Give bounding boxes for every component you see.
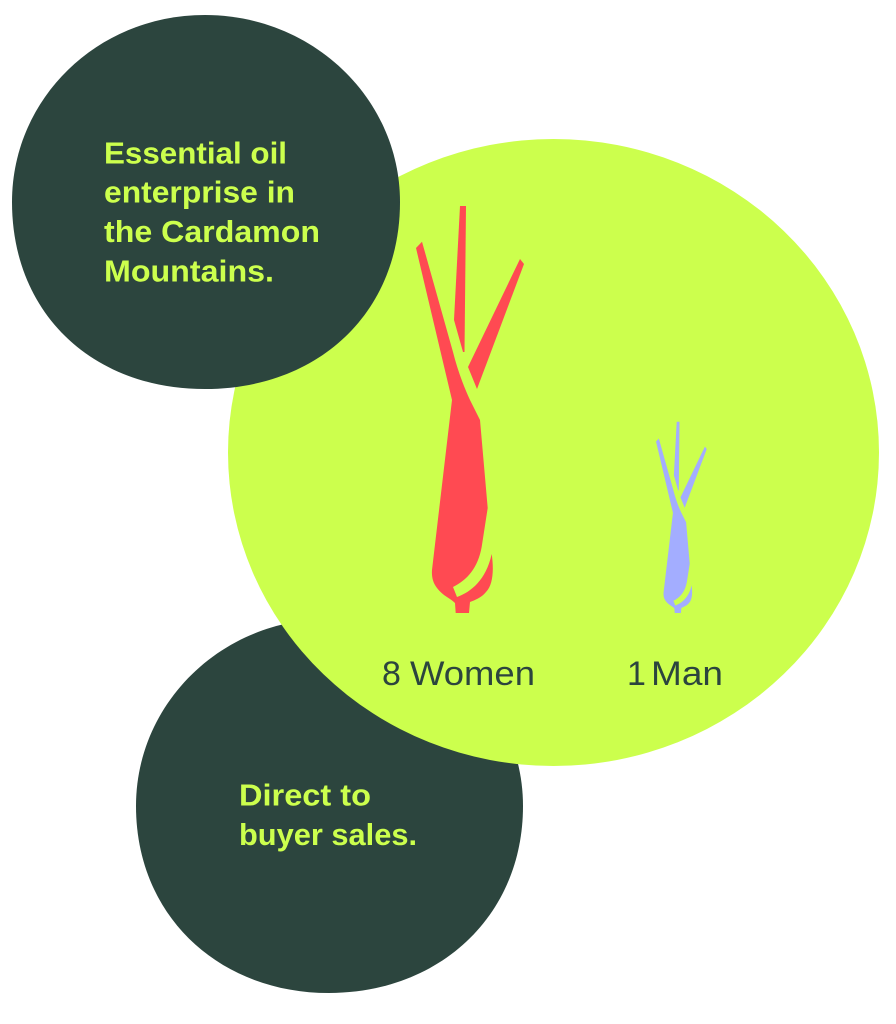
label: 1 Man xyxy=(627,655,723,693)
text: enterprise description xyxy=(104,136,320,288)
label: 1 Man: Man xyxy=(651,655,723,693)
lime circle: gender panel background xyxy=(228,139,879,766)
label: 8 Women: 8 xyxy=(382,655,401,693)
text: enterprise description: the Cardamon xyxy=(104,214,320,249)
text: sales description xyxy=(239,778,417,852)
dark blob: enterprise background xyxy=(12,15,400,389)
icon: small periwinkle plant for men xyxy=(656,422,707,613)
text: sales description: buyer sales. xyxy=(239,817,417,852)
label: 1 Man: 1 xyxy=(627,655,646,693)
icon: large red plant for women xyxy=(416,206,524,613)
text: sales description: Direct to xyxy=(239,778,371,812)
text: enterprise description: Mountains. xyxy=(104,254,274,288)
label: 8 Women: Women xyxy=(410,655,535,693)
dark blob: sales channel background xyxy=(136,619,523,993)
text: enterprise description: enterprise in xyxy=(104,174,295,210)
text: enterprise description: Essential oil xyxy=(104,136,287,170)
